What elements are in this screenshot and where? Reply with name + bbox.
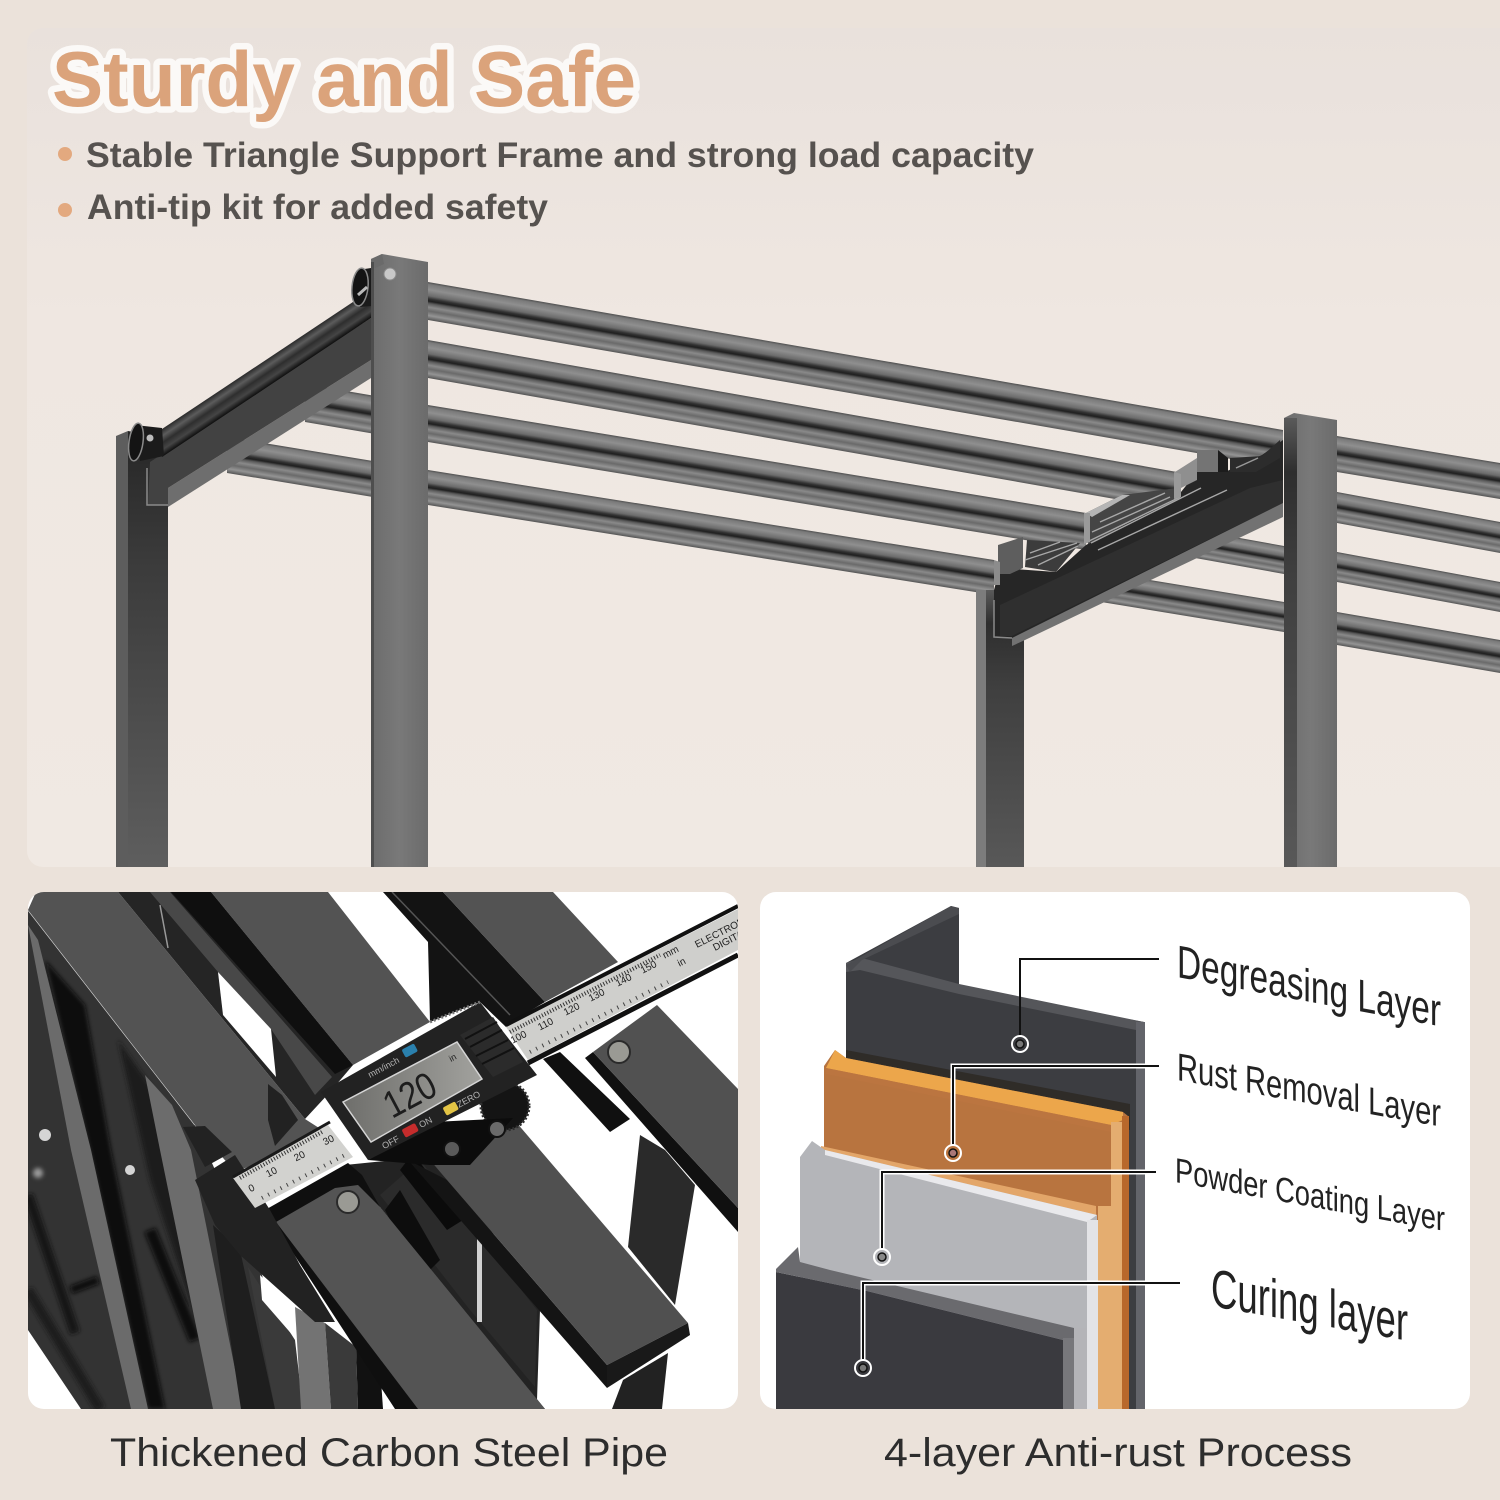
curing layer sheet <box>776 1247 1087 1409</box>
callout: degreasing leader line <box>1012 959 1159 1052</box>
digital caliper body and display: 120 <box>377 1065 444 1127</box>
caliper steel ruler with scale: mm <box>661 944 681 961</box>
caliper steel ruler with scale: 150 <box>639 959 659 976</box>
flat bar lower segments <box>265 1005 738 1409</box>
caliper steel ruler with scale: ELECTRONIC <box>693 912 756 951</box>
caliper steel ruler with scale: 120 <box>562 1001 582 1018</box>
bullet list: Anti-tip kit for added safety <box>87 188 549 227</box>
caption: thickened carbon steel pipe: Thickened Carbon Steel Pipe <box>110 1431 668 1475</box>
rust removal layer sheet <box>824 1050 1130 1409</box>
caliper steel ruler with scale: 130 <box>587 987 607 1004</box>
panel: 4-layer anti-rust process diagram <box>760 892 1470 1409</box>
panel: thickened carbon steel pipe photo <box>28 892 756 1409</box>
front-left post with screw <box>371 254 428 867</box>
caliper steel ruler with scale: 100 <box>509 1029 529 1046</box>
flat bar upper segments <box>28 892 618 1172</box>
caliper jaws <box>183 1084 335 1322</box>
powder coating layer sheet <box>800 1141 1111 1409</box>
caliper steel ruler with scale: 110 <box>536 1016 556 1033</box>
digital caliper body and display <box>321 1002 537 1165</box>
digital caliper body and display: OFF <box>380 1133 401 1151</box>
caliper steel ruler with scale <box>233 906 756 1208</box>
caliper steel ruler with scale: in <box>676 956 688 969</box>
shelf frame illustration <box>116 254 1500 867</box>
digital caliper body and display: ZERO <box>455 1089 482 1110</box>
layer labels <box>1175 935 1445 1353</box>
back-left post <box>116 431 168 867</box>
dark structure below caliper <box>345 1153 540 1400</box>
bullet list: Stable Triangle Support Frame and strong load capacity <box>86 136 1035 175</box>
digital caliper body and display: mm/inch <box>366 1055 401 1080</box>
right post <box>1284 413 1337 867</box>
back post <box>976 590 1024 867</box>
long rails <box>227 282 1283 595</box>
caliper steel ruler with scale: 10 <box>264 1165 280 1180</box>
panel: product frame background <box>27 28 1500 867</box>
callout: rust removal leader line <box>945 1066 1159 1161</box>
callout: curing leader line <box>855 1283 1180 1376</box>
caliper steel ruler with scale: 140 <box>614 972 634 989</box>
degreasing layer sheet <box>846 906 1145 1409</box>
caliper steel ruler with scale: 20 <box>292 1149 308 1164</box>
caption: 4-layer anti-rust process: 4-layer Anti-rust Process <box>884 1431 1352 1475</box>
tube end connectors <box>126 267 371 462</box>
left cross beam <box>147 290 371 507</box>
blurred left side frame with lattice <box>28 910 383 1409</box>
bullet list <box>58 136 1035 227</box>
layer labels: Curing layer <box>1211 1257 1408 1353</box>
title: Sturdy and Safe <box>52 35 636 123</box>
right cross beam <box>994 440 1283 646</box>
dark frame between the first two bars <box>118 892 353 1119</box>
black rail and uprights around third bar <box>383 892 695 1409</box>
rear rails behind the posts <box>1089 436 1500 673</box>
digital caliper body and display: ON <box>417 1115 434 1130</box>
callout: powder coating leader line <box>874 1172 1156 1265</box>
digital caliper body and display: in <box>447 1052 458 1064</box>
caliper steel ruler with scale: 0 <box>247 1182 257 1195</box>
caliper steel ruler with scale: DIGITAL <box>711 926 751 954</box>
caliper steel ruler with scale: 30 <box>321 1133 337 1148</box>
